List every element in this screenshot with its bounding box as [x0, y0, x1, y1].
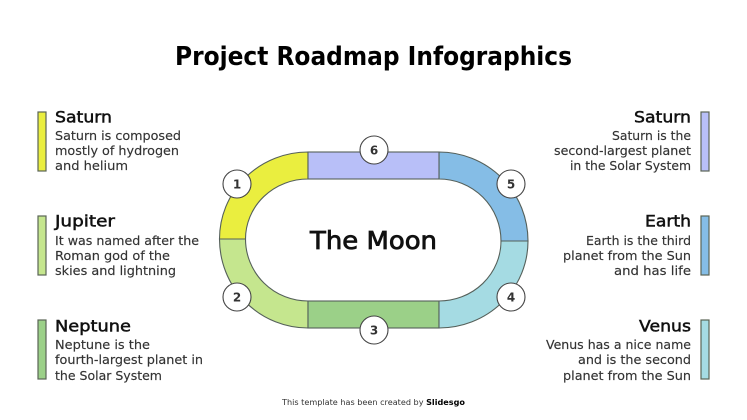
footer credit: This template has been created by Slidesgo — [281, 398, 465, 407]
segment 3: green — [308, 301, 439, 328]
chart: roadmap ring — [220, 136, 528, 344]
text block: Jupiter description: It was named after the — [55, 234, 199, 248]
node 2 — [223, 283, 251, 311]
node 1: 1 — [233, 178, 241, 192]
panel: left item 1 Saturn — [38, 108, 181, 173]
heading: Jupiter: Jupiter — [54, 212, 115, 230]
heading: Earth: Earth — [645, 212, 691, 230]
panel: left item 3 Neptune — [38, 316, 203, 383]
color bar: yellow — [38, 112, 46, 171]
heading: Neptune: Neptune — [55, 316, 131, 336]
segment 5: blue — [439, 152, 528, 241]
node 5: 5 — [507, 178, 515, 192]
text block: Neptune description: Neptune is the — [55, 338, 150, 352]
node 3: 3 — [370, 324, 378, 338]
heading: Saturn: Saturn — [55, 108, 112, 126]
heading: Venus: Venus — [639, 316, 691, 336]
color bar: light teal — [701, 320, 709, 379]
text block: Saturn description: Saturn is the — [612, 129, 691, 143]
text block: Saturn description: second-largest planet — [554, 144, 691, 158]
text block: Saturn description: and helium — [55, 159, 128, 173]
node 2: 2 — [233, 290, 241, 304]
node 1 — [223, 170, 251, 198]
text block: Saturn description — [554, 129, 691, 173]
text block: Venus description: Venus has a nice name — [546, 338, 691, 352]
text block: Saturn description: in the Solar System — [570, 159, 691, 173]
text block: Jupiter description — [55, 234, 199, 278]
text block: Earth description — [563, 234, 691, 278]
node 4: 4 — [507, 290, 515, 304]
panel: right item 3 Venus — [546, 316, 709, 383]
segment 2: light green — [220, 239, 308, 328]
text block: Earth description: planet from the Sun — [563, 249, 691, 263]
segment 6: periwinkle — [308, 152, 439, 179]
color bar: green — [38, 320, 46, 379]
text block: Neptune description: fourth-largest planet in — [55, 353, 203, 367]
segment 1: yellow — [220, 152, 308, 239]
color bar: light green — [38, 216, 46, 275]
heading: Saturn: Saturn — [634, 108, 691, 126]
text block: Venus description: planet from the Sun — [563, 369, 691, 383]
center label: The Moon: The Moon — [309, 226, 437, 255]
node 4 — [497, 283, 525, 311]
text block: Neptune description — [55, 338, 203, 383]
node 3 — [360, 316, 388, 344]
node 5 — [497, 170, 525, 198]
segment 4: light teal — [439, 241, 528, 328]
panel: left item 2 Jupiter — [38, 212, 199, 278]
node 6: 6 — [370, 144, 378, 158]
color bar: periwinkle — [701, 112, 709, 171]
text block: Neptune description: the Solar System — [55, 369, 162, 383]
text block: Saturn description: mostly of hydrogen — [55, 144, 179, 158]
text block: Saturn description — [55, 129, 181, 173]
node 6 — [360, 136, 388, 164]
text block: Earth description: Earth is the third — [586, 234, 691, 248]
panel: right item 2 Earth — [563, 212, 709, 278]
text block: Earth description: and has life — [614, 264, 691, 278]
title: Project Roadmap Infographics — [175, 42, 572, 72]
text block: Venus description: and is the second — [578, 353, 691, 367]
color bar: blue — [701, 216, 709, 275]
text block: Jupiter description: Roman god of the — [55, 249, 170, 263]
text block: Venus description — [546, 338, 691, 383]
text block: Jupiter description: skies and lightning — [55, 264, 176, 278]
panel: right item 1 Saturn — [554, 108, 709, 173]
text block: Saturn description: Saturn is composed — [55, 129, 181, 143]
